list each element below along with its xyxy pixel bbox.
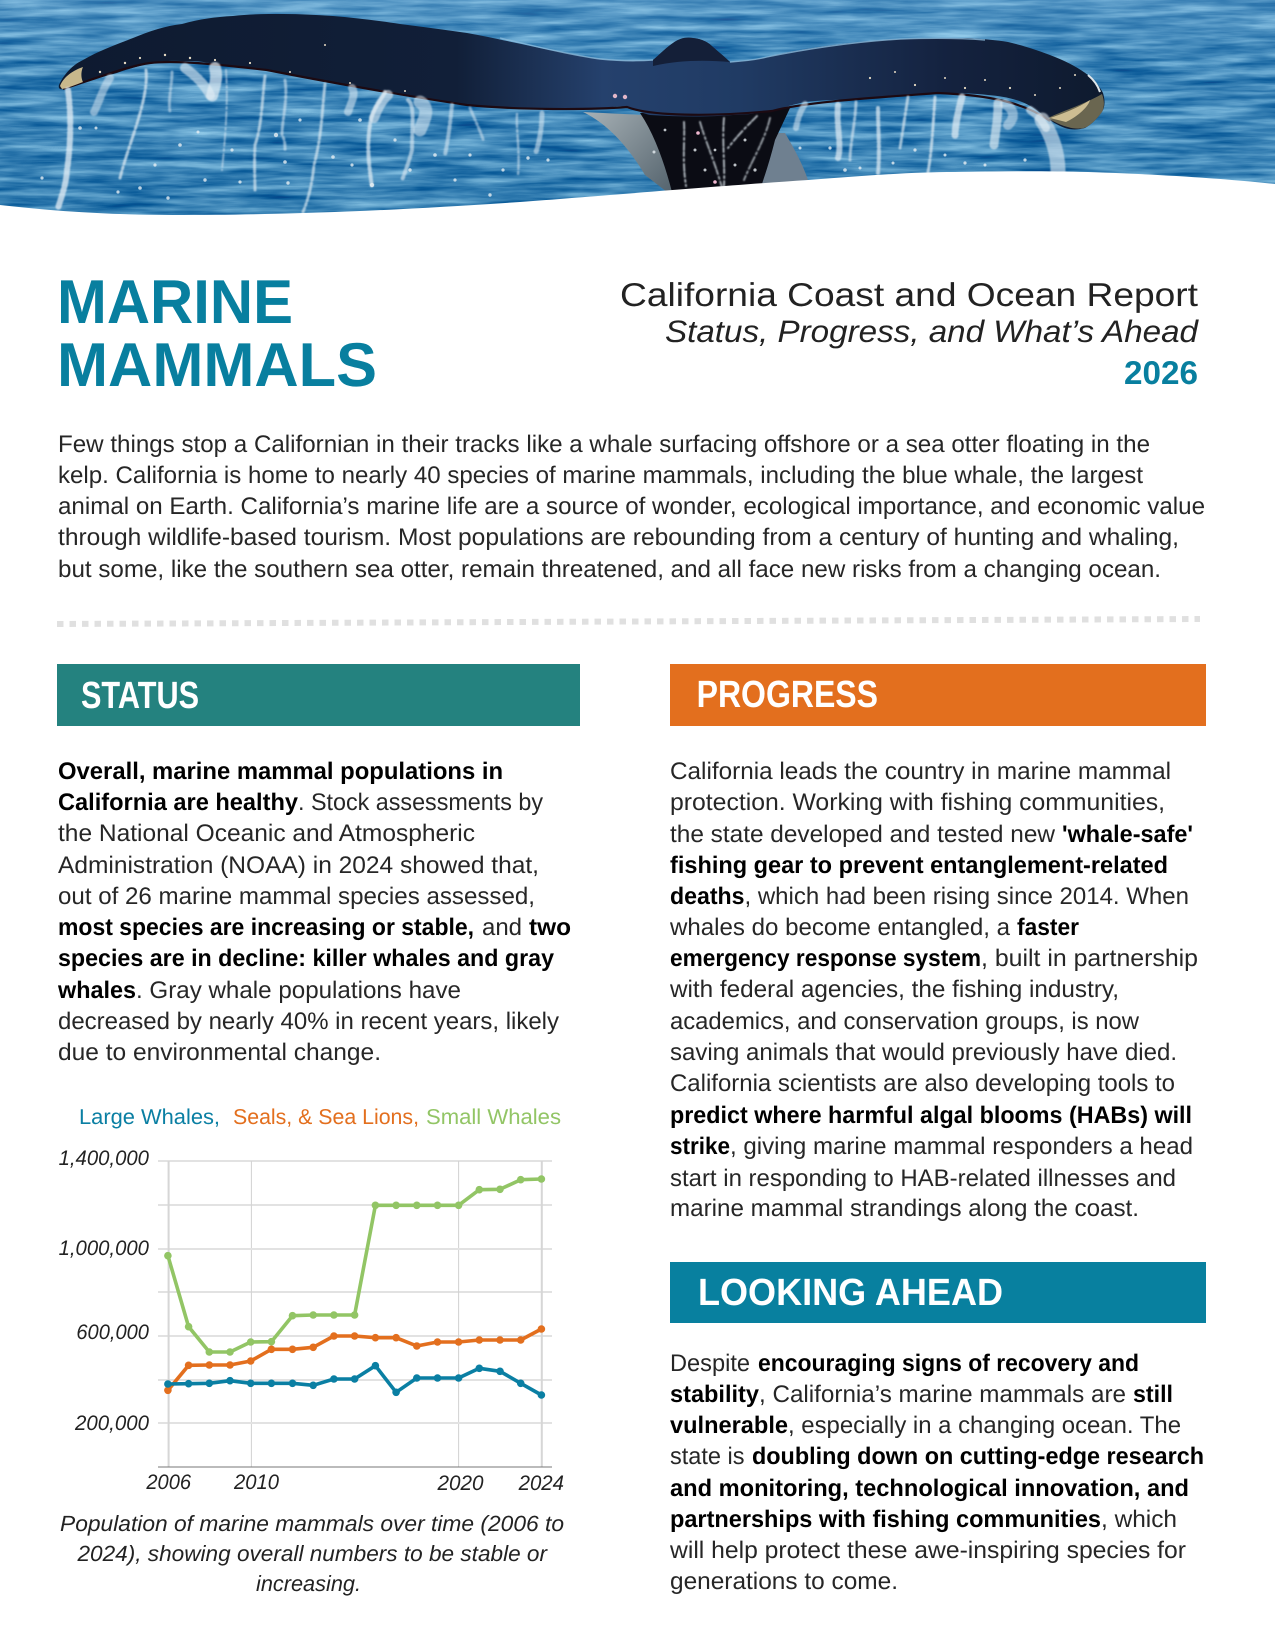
progress text: , built in partnership <box>981 945 1198 972</box>
y axis labels: 1,000,000 <box>59 1237 149 1260</box>
status text: species are in decline: killer whales and gray <box>58 945 555 972</box>
line chart: marine mammal population <box>59 1105 564 1495</box>
series: large whales <box>164 1362 545 1399</box>
x axis labels: 2020 <box>437 1472 484 1495</box>
looking ahead text: stability <box>670 1381 760 1408</box>
white wave edge <box>0 171 1275 230</box>
looking ahead text: partnerships with fishing communities <box>670 1506 1101 1533</box>
chart legend: Large Whales, <box>79 1105 220 1129</box>
report subtitle: Status, Progress, and What’s Ahead <box>665 314 1200 349</box>
looking ahead text: , California’s marine mammals are <box>759 1381 1126 1408</box>
progress text: marine mammal strandings along the coast. <box>670 1195 1139 1222</box>
looking ahead heading bar: LOOKING AHEAD <box>698 1272 1003 1314</box>
status text: Overall, marine mammal populations in <box>58 758 503 785</box>
x axis labels: 2010 <box>233 1471 279 1494</box>
progress text: strike <box>670 1133 730 1160</box>
status text: two <box>529 914 571 941</box>
intro paragraph: Few things stop a Californian in their tracks like a whale surfacing offshore or a sea otter floating in the <box>58 431 1150 458</box>
intro paragraph: kelp. California is home to nearly 40 species of marine mammals, including the blue whale, the largest <box>58 462 1143 489</box>
flecks on fluke edge <box>99 44 1076 99</box>
progress text: California leads the country in marine mammal <box>670 758 1171 785</box>
chart caption <box>60 1511 564 1596</box>
x axis labels <box>145 1471 564 1495</box>
looking ahead text: doubling down on cutting-edge research <box>752 1443 1204 1470</box>
intro paragraph: through wildlife-based tourism. Most populations are rebounding from a century of hunting and whaling, <box>58 524 1179 551</box>
status text: California are healthy <box>58 789 299 816</box>
progress text: saving animals that would previously have died. <box>670 1039 1177 1066</box>
progress text: deaths <box>670 883 744 910</box>
status text: out of 26 marine mammal species assessed, <box>58 883 535 910</box>
looking ahead text: , especially in a changing ocean. The <box>788 1412 1181 1439</box>
progress text: with federal agencies, the fishing industry, <box>669 976 1119 1003</box>
y axis labels: 200,000 <box>74 1412 149 1435</box>
looking ahead text: vulnerable <box>670 1412 788 1439</box>
looking ahead text <box>669 1350 1204 1595</box>
progress text <box>669 758 1198 1222</box>
looking ahead text: will help protect these awe-inspiring species for <box>669 1537 1186 1564</box>
looking ahead heading bar <box>670 1262 1206 1323</box>
report subtitle: 2026 <box>1124 354 1198 391</box>
y axis labels <box>59 1147 149 1435</box>
progress text: academics, and conservation groups, is now <box>670 1008 1140 1035</box>
looking ahead text: generations to come. <box>670 1568 898 1595</box>
progress text: the state developed and tested new <box>670 821 1056 848</box>
y axis labels: 1,400,000 <box>59 1147 149 1170</box>
progress text: whales do become entangled, a <box>669 914 1011 941</box>
progress text: 'whale-safe' <box>1062 821 1193 848</box>
x axis labels: 2024 <box>518 1472 564 1495</box>
status text: . Stock assessments by <box>298 789 543 816</box>
progress text: emergency response system <box>670 945 981 972</box>
y axis labels: 600,000 <box>76 1321 149 1344</box>
ocean water <box>0 0 1275 222</box>
progress text: faster <box>1017 914 1079 941</box>
intro paragraph: animal on Earth. California’s marine life are a source of wonder, ecological importance, and economic value <box>58 493 1205 520</box>
progress text: , which had been rising since 2014. When <box>744 883 1189 910</box>
progress text: protection. Working with fishing communities, <box>670 789 1165 816</box>
progress heading bar <box>670 664 1206 726</box>
status text: and <box>482 914 522 941</box>
progress heading bar: PROGRESS <box>697 674 878 716</box>
title: MARINE <box>57 268 293 337</box>
series: seals and sea lions <box>164 1325 545 1394</box>
header photo: whale tail above the sea <box>0 0 1275 230</box>
progress text: fishing gear to prevent entanglement-related <box>670 852 1168 879</box>
chart caption: 2024), showing overall numbers to be stable or <box>76 1541 549 1566</box>
report subtitle <box>620 276 1200 391</box>
water drips <box>58 68 1058 212</box>
title: MAMMALS <box>57 331 377 400</box>
title <box>57 268 377 400</box>
intro paragraph: but some, like the southern sea otter, remain threatened, and all face new risks from a changing ocean. <box>58 556 1161 583</box>
looking ahead text: Despite <box>670 1350 750 1377</box>
looking ahead text: state is <box>670 1443 744 1470</box>
panel: progress <box>669 664 1206 1222</box>
whale flukes <box>59 14 1105 130</box>
chart caption: Population of marine mammals over time (2006 to <box>60 1511 564 1536</box>
chart legend: Small Whales <box>426 1105 561 1129</box>
looking ahead text: and monitoring, technological innovation, and <box>670 1475 1189 1502</box>
water droplets <box>40 118 1027 200</box>
status heading bar <box>57 664 580 726</box>
tail stock below flukes <box>583 108 808 192</box>
looking ahead text: encouraging signs of recovery and <box>758 1350 1139 1377</box>
series: small whales <box>164 1175 545 1356</box>
status text: Administration (NOAA) in 2024 showed that, <box>58 852 539 879</box>
panel: looking ahead <box>669 1262 1206 1595</box>
status text: the National Oceanic and Atmospheric <box>58 820 475 847</box>
report subtitle: California Coast and Ocean Report <box>620 276 1198 313</box>
status text <box>57 758 571 1066</box>
looking ahead text: still <box>1133 1381 1173 1408</box>
intro paragraph <box>58 431 1205 583</box>
status text: due to environmental change. <box>58 1039 381 1066</box>
status text: . Gray whale populations have <box>136 977 461 1004</box>
progress text: California scientists are also developing tools to <box>670 1070 1175 1097</box>
chart caption: increasing. <box>256 1571 361 1596</box>
status text: decreased by nearly 40% in recent years, likely <box>58 1008 559 1035</box>
status text: whales <box>57 977 136 1004</box>
panel: status <box>57 664 580 1596</box>
looking ahead text: , which <box>1101 1506 1177 1533</box>
progress text: predict where harmful algal blooms (HABs) will <box>670 1102 1192 1129</box>
status text: most species are increasing or stable, <box>58 914 474 941</box>
chart legend <box>79 1105 561 1129</box>
progress text: start in responding to HAB-related illnesses and <box>670 1165 1176 1192</box>
status heading bar: STATUS <box>81 675 199 717</box>
chart legend: Seals, & Sea Lions, <box>233 1105 419 1129</box>
progress text: , giving marine mammal responders a head <box>730 1133 1193 1160</box>
x axis labels: 2006 <box>145 1471 191 1494</box>
